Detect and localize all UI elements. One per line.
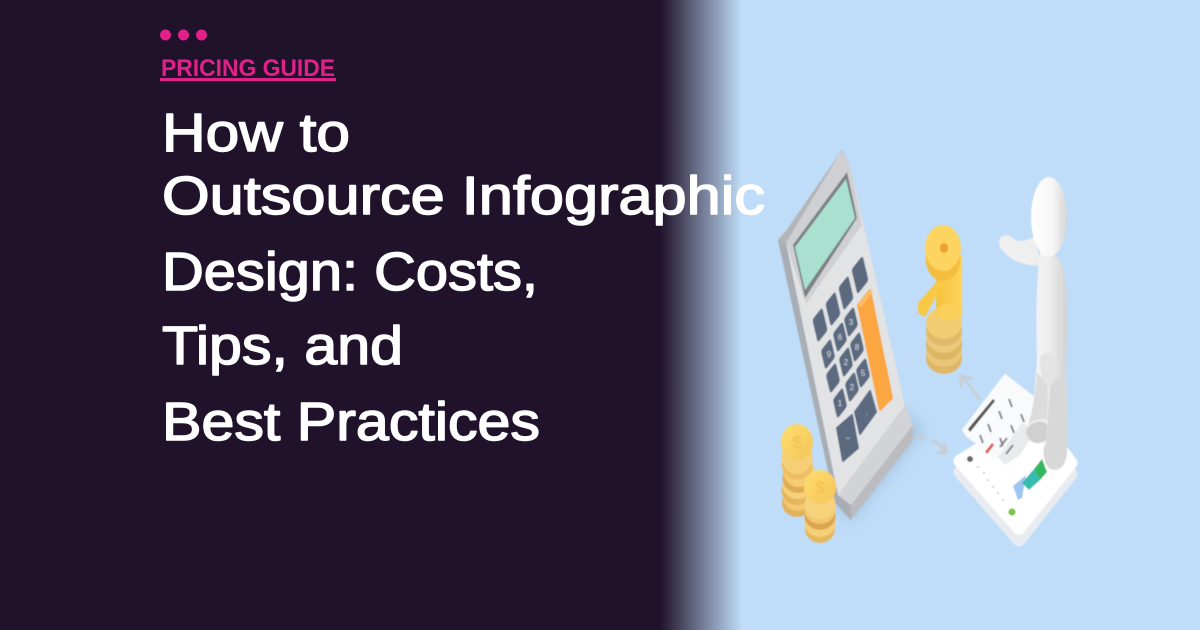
near hand [1040, 353, 1057, 387]
icon: left coin stack [781, 424, 814, 517]
title [162, 103, 765, 452]
key labels: 9 [827, 350, 832, 359]
icon: 3D white figure [999, 177, 1067, 470]
icon: white platform with document [960, 375, 1071, 540]
torso and legs [1026, 250, 1067, 470]
document [963, 375, 1040, 465]
illustration: calculator, coins and figure [778, 150, 1071, 543]
icon: yellow coin lever stack [918, 225, 962, 374]
icon: calculator [778, 150, 925, 522]
feet [1026, 421, 1047, 443]
title: Tips, and [162, 316, 403, 376]
icon: right coin stack [804, 470, 836, 543]
icon: left coin stack: $ [792, 433, 802, 452]
arrow: to coin stack [961, 376, 981, 400]
legs shading [1028, 372, 1048, 426]
orange key [858, 290, 892, 410]
calculator keys [812, 255, 876, 461]
key labels: − [846, 434, 851, 443]
dashboard screen [967, 456, 1047, 516]
category dots [160, 30, 207, 40]
icon: right coin stack: $ [815, 478, 825, 497]
key labels: 1 [838, 399, 843, 408]
key labels: 3 [849, 318, 854, 327]
head [1031, 177, 1067, 257]
title: How to [162, 103, 350, 163]
key labels: 2 [844, 358, 849, 367]
key labels [827, 318, 868, 443]
title: Design: Costs, [162, 242, 538, 302]
category label: pricing guide: PRICING GUIDE [161, 55, 335, 82]
title: Outsource Infographic [162, 166, 765, 226]
calculator screen [793, 172, 857, 298]
arrow: to platform [917, 436, 946, 453]
key labels: 6 [838, 333, 843, 342]
key labels: 8 [855, 343, 860, 352]
arm and hand [999, 235, 1042, 266]
key labels: 5 [861, 369, 866, 378]
key labels: 2 [850, 383, 855, 392]
title: Best Practices [162, 392, 540, 452]
key labels: . [866, 408, 868, 417]
